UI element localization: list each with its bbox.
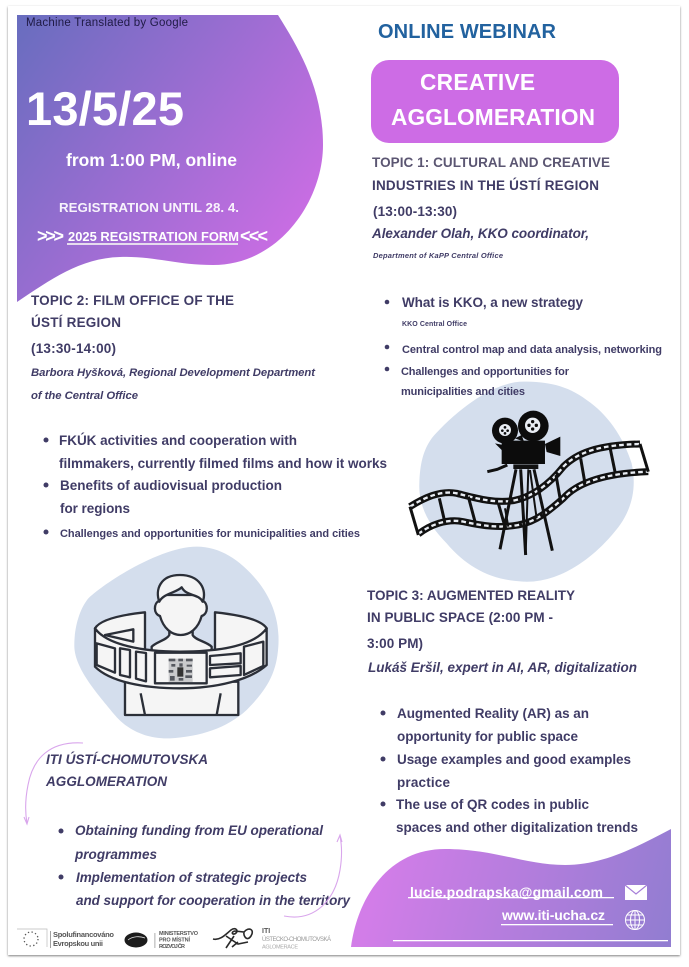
- AR band back panels: [95, 612, 145, 650]
- text block: topic 2: ÚSTÍ REGION: [31, 315, 121, 330]
- text block: topic 3: [367, 588, 637, 675]
- bullet list: topic 1: municipalities and cities: [401, 386, 525, 398]
- text block: topic 3: Lukáš Eršil, expert in AI, AR, digitalization: [368, 660, 637, 675]
- text block: topic 1: INDUSTRIES IN THE ÚSTÍ REGION: [372, 178, 599, 193]
- logo: ministry of regional development: [124, 931, 199, 950]
- bullet list: topic 3: spaces and other digitalization trends: [396, 820, 638, 835]
- email: lucie.podrapska@gmail.com: [410, 884, 603, 900]
- gradient blob: top left: [17, 15, 323, 302]
- bullet list: topic 3: practice: [397, 775, 450, 790]
- bullet list: topic 3: The use of QR codes in public: [396, 797, 589, 812]
- time: from 1:00 PM, online: [66, 150, 237, 170]
- logo: ministry of regional development: MINISTERSTVO: [159, 931, 199, 937]
- icon: globe: [626, 910, 644, 930]
- text block: topic 2: (13:30-14:00): [31, 341, 116, 356]
- text block: topic 3: IN PUBLIC SPACE (2:00 PM -: [367, 610, 553, 625]
- panel: date and registration: [17, 15, 323, 302]
- arrow: curved top left: [24, 743, 83, 824]
- bullet list: topic 1: Central control map and data analysis, networking: [402, 344, 662, 356]
- text block: topic 3: TOPIC 3: AUGMENTED REALITY: [367, 588, 575, 603]
- text block: topic 1: [371, 155, 610, 260]
- registration form link: >>>: [37, 226, 64, 246]
- text block: topic 3: 3:00 PM): [367, 636, 423, 651]
- bullet list: ITI: Obtaining funding from EU operational: [75, 823, 323, 838]
- bullet list: ITI: Implementation of strategic projects: [76, 870, 307, 885]
- heading: ITI agglomeration: AGGLOMERATION: [45, 774, 167, 789]
- bullet list: topic 1: Challenges and opportunities for: [401, 366, 570, 378]
- machine translation note: Machine Translated by Google: [26, 17, 188, 29]
- tripod: [487, 465, 552, 555]
- logo: ITI Ústecko-Chomutovská: ÚSTECKO-CHOMUTOVSKÁ: [262, 936, 331, 943]
- bullet list: topic 1: What is KKO, a new strategy: [402, 295, 583, 310]
- head: [155, 595, 207, 635]
- heading: ITI agglomeration: ITI ÚSTÍ-CHOMUTOVSKA: [46, 752, 208, 767]
- icon: envelope: [625, 885, 647, 900]
- arrow: curved bottom right: [284, 835, 342, 917]
- illustration: person with augmented reality band: [74, 547, 279, 738]
- bullet list: topic 2: Benefits of audiovisual production: [60, 478, 282, 493]
- bullet list: topic 3: [380, 706, 638, 835]
- text block: topic 1: TOPIC 1: CULTURAL AND CREATIVE: [372, 155, 610, 170]
- gradient blob: bottom right: [351, 829, 671, 947]
- illustration: film camera and film strip: [410, 382, 648, 582]
- torso: [125, 682, 238, 715]
- logo: ministry of regional development: PRO MÍSTNÍ: [159, 936, 190, 944]
- title box: creative agglomeration: CREATIVE: [420, 69, 535, 95]
- shoulders and neck: [152, 627, 212, 653]
- registration deadline: REGISTRATION UNTIL 28. 4.: [59, 200, 239, 215]
- website: www.iti-ucha.cz: [501, 907, 605, 923]
- bullet list: ITI: [58, 823, 351, 908]
- registration form link: 2025 REGISTRATION FORM: [68, 229, 239, 244]
- bullet list: topic 2: [44, 433, 387, 540]
- text block: topic 2: [31, 293, 316, 402]
- bullet list: topic 2: filmmakers, currently filmed films and how it works: [59, 456, 387, 471]
- logo: ITI Ústecko-Chomutovská: [213, 928, 331, 950]
- date: 13/5/25: [26, 82, 184, 135]
- logo: co-funded by the EU: Evropskou unii: [53, 939, 103, 948]
- registration form link: [37, 226, 268, 246]
- bullet list: topic 2: FKÚK activities and cooperation with: [59, 433, 297, 448]
- AR band front: [95, 628, 267, 688]
- blob: camera background: [419, 382, 634, 582]
- title box: creative agglomeration: [371, 60, 619, 143]
- text block: topic 1: (13:00-13:30): [373, 204, 457, 219]
- bullet list: topic 2: Challenges and opportunities for municipalities and cities: [60, 528, 360, 540]
- film strip: [410, 444, 648, 535]
- bullet list: ITI: programmes: [74, 847, 157, 862]
- QR code: [169, 659, 193, 682]
- bullet list: topic 3: opportunity for public space: [397, 729, 578, 744]
- bullet list: topic 3: Usage examples and good examples: [397, 752, 631, 767]
- heading: ITI agglomeration: [45, 752, 208, 789]
- text block: topic 2: Barbora Hyšková, Regional Development Department: [31, 367, 316, 379]
- logo: ministry of regional development: ROZVOJ ČR: [159, 943, 185, 950]
- logo: ITI Ústecko-Chomutovská: ITI: [262, 928, 270, 935]
- heading: online webinar: ONLINE WEBINAR: [378, 21, 557, 43]
- camera body: [492, 411, 560, 464]
- text block: topic 2: of the Central Office: [31, 390, 138, 402]
- text block: topic 1: Department of KaPP Central Office: [373, 251, 503, 260]
- hair: [158, 575, 204, 602]
- text block: topic 1: Alexander Olah, KKO coordinator,: [371, 226, 589, 241]
- registration form link: <<<: [240, 226, 268, 246]
- logo: ITI Ústecko-Chomutovská: AGLOMERACE: [262, 944, 298, 950]
- bullet list: topic 1: [385, 295, 662, 398]
- blob: person background: [74, 547, 279, 738]
- divider line: [393, 940, 668, 941]
- bullet list: topic 1: KKO Central Office: [402, 321, 467, 328]
- logo: co-funded by the EU: [17, 929, 114, 948]
- bullet list: ITI: and support for cooperation in the territory: [76, 893, 351, 908]
- text block: topic 2: TOPIC 2: FILM OFFICE OF THE: [31, 293, 234, 308]
- logo: co-funded by the EU: Spolufinancováno: [53, 930, 114, 939]
- panel: contact details: [351, 829, 671, 947]
- AR band screens: [97, 643, 115, 673]
- bullet list: topic 3: Augmented Reality (AR) as an: [397, 706, 589, 721]
- bullet list: topic 2: for regions: [60, 501, 130, 516]
- title box: creative agglomeration: AGGLOMERATION: [391, 104, 595, 130]
